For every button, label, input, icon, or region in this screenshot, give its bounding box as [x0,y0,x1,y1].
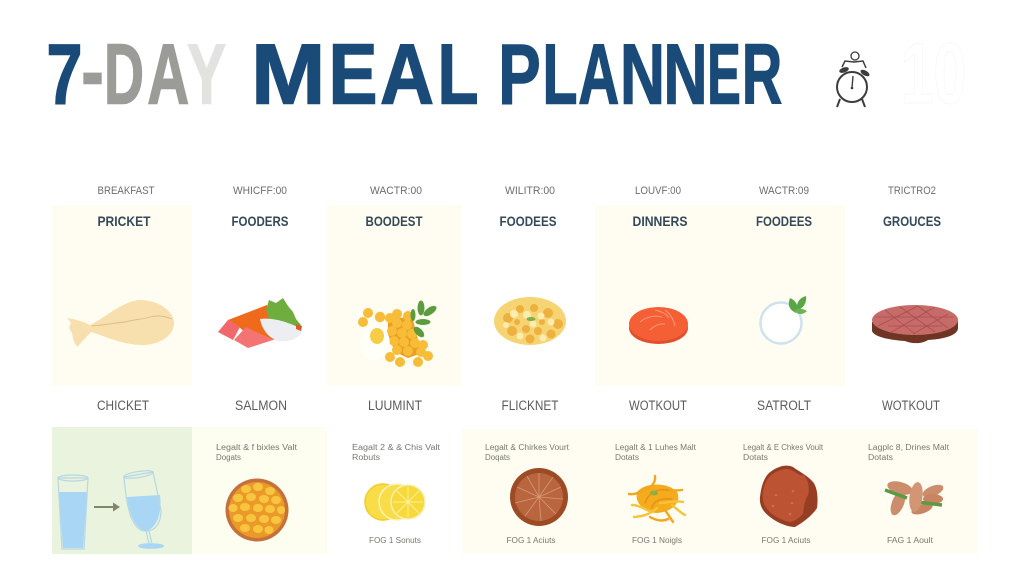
meal names: WOTKOUT [882,398,940,413]
title: P [498,28,541,122]
icon: almonds with herbs [885,479,945,517]
meal names: LUUMINT [368,398,422,413]
meal names: WOTKOUT [629,398,687,413]
icon: salmon with lettuce [218,298,302,348]
title: N [664,28,708,122]
title: A [578,28,619,122]
day labels: LOUVF:00 [635,185,681,197]
meal headings: FOODERS [232,213,288,229]
title [46,24,782,122]
title: E [328,28,378,122]
description text: column 6 [743,443,824,462]
caption: column 5: FOG 1 Noigls [632,535,682,545]
icon: lemon slices [365,484,425,520]
icon: water glasses with arrow [58,469,164,549]
description text: column 7: Lagplc 8, Drines Malt [868,443,950,452]
icon: bowl of chickpeas [226,478,288,542]
caption: column 6: FOG 1 Aciuts [762,535,810,545]
meal headings: PRICKET [98,213,151,229]
description text: column 5: Legalt & 1 Luhes Malt [615,443,697,452]
day labels: WACTR:00 [370,185,422,197]
description text: column 3 [352,443,441,462]
description text: column 3: Eagalt 2 & & Chis Valt [352,443,441,452]
meal headings: DINNERS [632,213,688,229]
description text: column 6: Legalt & E Chkes Voult [743,443,824,452]
description text: column 6: Dotats [743,453,768,462]
icon: egg and chickpeas [357,300,438,367]
meal names [97,398,940,413]
title: A [147,28,189,122]
title: 7 [46,28,82,122]
description text: column 5 [615,443,697,462]
caption: column 3: FOG 1 Sonuts [369,535,421,545]
panel: bottom row backgrounds [52,427,978,554]
description text: column 4: Doqats [485,453,510,462]
icon: brown round dish [510,468,568,526]
icon: salmon patty [629,307,688,344]
meal headings: BOODEST [366,213,423,229]
ghost number 10: 10 [900,26,966,122]
icon: alarm clock [837,52,871,107]
title: R [742,28,782,122]
description text: column 7: Dotats [868,453,893,462]
day labels: TRICTRO2 [888,185,936,197]
title: L [438,28,478,122]
description text: column 2: Legalt & f bixles Valt [216,443,298,452]
day labels [98,185,936,197]
description text: column 3: Robuts [352,453,380,462]
title: D [104,28,144,122]
description text: column 2 [216,443,298,462]
title: N [620,28,665,122]
meal headings: GROUCES [883,213,941,229]
icon: meat chunk [760,466,818,527]
description text: column 4 [485,443,570,462]
day labels: BREAKFAST [98,185,155,197]
panel: top row backgrounds [52,205,845,386]
description text: column 4: Legalt & Chirkes Vourt [485,443,570,452]
icon: fish fillet [67,300,174,347]
meal names: SATROLT [757,398,811,413]
meal headings: FOODEES [500,213,556,229]
icon: chickpea plate [494,297,566,345]
day labels: WILITR:00 [505,185,555,197]
title: M [251,28,326,122]
description text: column 5: Dotats [615,453,639,462]
caption: column 7: FAG 1 Aoult [887,535,934,545]
day labels: WHICFF:00 [233,185,287,197]
day labels: WACTR:09 [759,185,809,197]
title: L [542,28,578,122]
meal headings [98,213,941,229]
description text: column 2: Dogats [216,453,241,462]
meal headings: FOODEES [756,213,812,229]
title: E [707,28,741,122]
icon: grilled steak [872,305,958,343]
title: - [81,24,104,120]
icon: empty plate with leaf [760,296,807,344]
caption: column 4: FOG 1 Aciuts [506,535,556,545]
meal names: CHICKET [97,398,149,413]
title: Y [187,28,226,122]
description text: column 7 [868,443,950,462]
title: A [380,28,434,122]
meal names: FLICKNET [502,398,558,413]
icon: noodles [629,476,685,522]
meal names: SALMON [235,398,287,413]
